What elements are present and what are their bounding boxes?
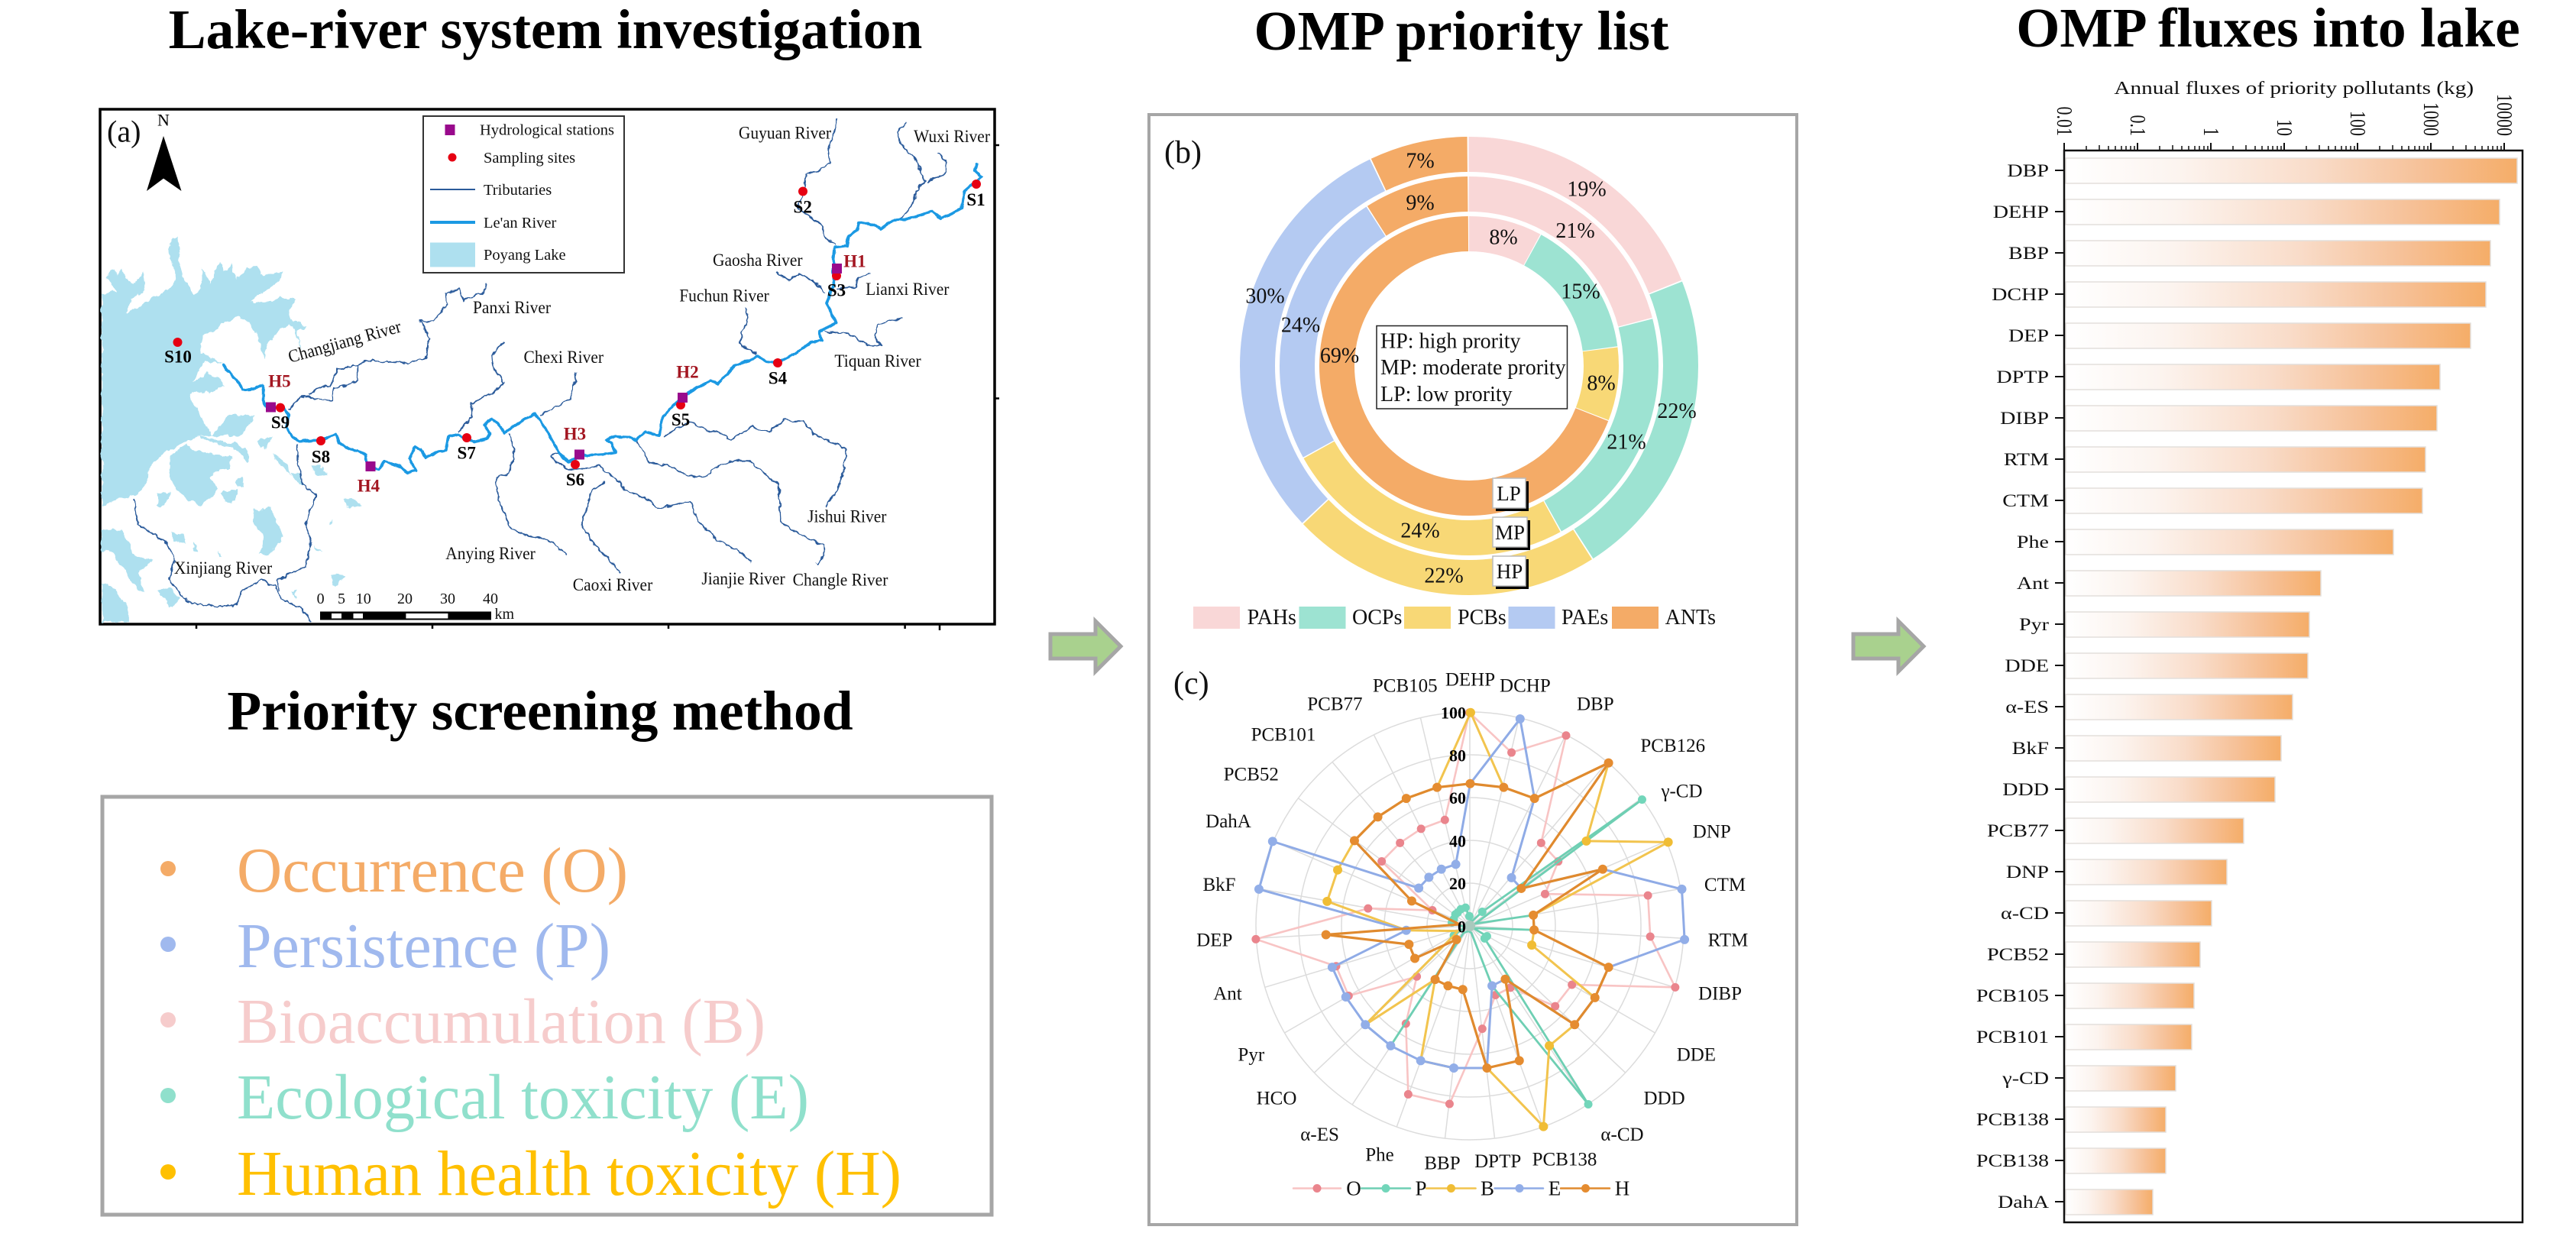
radar legend: O: [1346, 1176, 1361, 1199]
map: river name labels: Chexi River: [524, 347, 604, 367]
map: sampling site labels: S7: [458, 443, 476, 463]
map: hydrological station labels: H2: [676, 362, 699, 382]
map: river name labels: [174, 123, 990, 594]
map: sampling site labels: S6: [566, 471, 584, 489]
bar chart category labels: DBP: [2007, 160, 2049, 180]
donut percentage labels: 7%: [1406, 150, 1435, 173]
map: river name labels: Lianxi River: [866, 279, 950, 299]
radar category labels: γ-CD: [1660, 781, 1703, 802]
bar chart category labels: γ-CD: [2002, 1068, 2049, 1088]
radar axis numbers: 100: [1441, 703, 1466, 723]
map: river name labels: Fuchun River: [679, 286, 769, 306]
bar chart category labels: DIBP: [2000, 408, 2049, 428]
bar chart log axis ticks and labels: 1: [2199, 128, 2224, 136]
map: sampling site labels: S5: [672, 410, 690, 429]
ring: high priority (outer): [1257, 154, 1681, 578]
map: river name labels: Anying River: [445, 543, 536, 563]
map: scale bar: 20: [397, 591, 413, 607]
map: scale bar: 0: [317, 591, 325, 607]
bar chart log axis ticks and labels: [2052, 94, 2517, 150]
donut percentage labels: 30%: [1245, 284, 1285, 309]
map: hydrological station labels: [268, 252, 866, 495]
donut legend: PCBs: [1458, 606, 1506, 630]
series E: ecological toxicity: [1259, 719, 1684, 1068]
radar axis numbers: [1441, 703, 1466, 937]
map: legend box: Le'an River: [484, 215, 557, 231]
bar chart category labels: CTM: [2002, 490, 2049, 510]
radar category labels: DEHP: [1445, 669, 1495, 691]
bar chart log axis ticks and labels: 0.01: [2052, 107, 2077, 136]
map: Poyang Lake water body: [102, 236, 360, 623]
radar legend: E: [1549, 1176, 1561, 1199]
map: river name labels: Guyuan River: [739, 123, 832, 143]
bar chart log axis ticks and labels: 10000: [2492, 94, 2517, 136]
radar category labels: [1196, 669, 1748, 1173]
map: tributaries and Le'an River, west part: [134, 283, 504, 623]
bar chart category labels: DNP: [2006, 862, 2049, 882]
radar category labels: RTM: [1708, 930, 1748, 950]
bar chart log axis ticks and labels: 0.1: [2125, 115, 2150, 136]
arrow: left to middle: [1050, 621, 1121, 672]
map: river name labels: Jianjie River: [701, 568, 785, 588]
map: river name labels: Tiquan River: [834, 351, 921, 371]
donut percentage labels: 21%: [1607, 431, 1646, 454]
map: river name labels: Jishui River: [807, 506, 887, 526]
map: sampling site labels: S2: [794, 197, 812, 217]
radar category labels: DDE: [1677, 1045, 1716, 1065]
map: hydrological station labels: H3: [564, 425, 586, 443]
donut legend: PAHs: [1248, 606, 1296, 630]
radar category labels: Ant: [1213, 984, 1242, 1004]
ring tag: MP: MP: [1495, 521, 1525, 544]
ring tag: MP: [1493, 517, 1530, 550]
radar category labels: DDD: [1644, 1088, 1685, 1109]
radar axis numbers: 80: [1449, 746, 1466, 765]
bar chart log axis ticks and labels: 1000: [2419, 102, 2444, 136]
radar category labels: Pyr: [1238, 1045, 1265, 1065]
bar chart: annual fluxes: [1976, 77, 2523, 1222]
radar category labels: PCB101: [1251, 724, 1316, 745]
radar category labels: BBP: [1424, 1154, 1461, 1173]
panel: map of the lake-river system: [100, 109, 999, 630]
radar legend: P: [1415, 1176, 1427, 1199]
donut percentage labels: 8%: [1587, 371, 1616, 396]
radar category labels: DPTP: [1474, 1151, 1521, 1172]
panel letter c: (c): [1173, 666, 1209, 701]
bar chart log axis ticks and labels: 10: [2272, 119, 2297, 136]
bar chart category labels: Pyr: [2019, 614, 2049, 634]
bar chart axis title: Annual fluxes of priority pollutants (kg): [2114, 77, 2474, 98]
radar category labels: α-CD: [1600, 1125, 1644, 1145]
map: river name labels: Caoxi River: [573, 574, 653, 594]
map: sampling site labels: S4: [769, 368, 788, 388]
map: scale bar: 30: [440, 591, 455, 607]
bar chart category labels: DEHP: [1993, 202, 2049, 222]
map: legend box: Hydrological stations: [480, 122, 614, 139]
radar category labels: BkF: [1202, 875, 1236, 895]
panel: priority screening criteria list: [102, 797, 992, 1215]
radar category labels: DBP: [1577, 694, 1614, 715]
donut percentage labels: 22%: [1657, 400, 1697, 423]
bar chart category labels: Ant: [2017, 573, 2049, 593]
radar legend: H: [1615, 1176, 1629, 1199]
bar chart category labels: BBP: [2008, 243, 2049, 263]
ring: low priority (inner): [1337, 234, 1601, 498]
bar chart category labels: PCB77: [1987, 820, 2049, 840]
map: scale bar: 5: [338, 591, 345, 607]
map: river name labels: Wuxi River: [914, 126, 990, 146]
title: lake-river system investigation: Lake-river system investigation: [169, 0, 922, 60]
bullet item: ecological toxicity: Ecological toxicity (E): [237, 1062, 809, 1133]
bar chart category labels: DahA: [1998, 1192, 2050, 1212]
map: legend box: Tributaries: [484, 182, 552, 199]
map: scale bar: 40: [483, 591, 498, 607]
bar chart category labels: [1976, 160, 2050, 1212]
radar category labels: PCB105: [1373, 675, 1438, 696]
radar category labels: PCB77: [1307, 694, 1363, 715]
map: sampling site labels: [164, 190, 985, 489]
map: panel letter a: (a): [107, 115, 141, 148]
donut legend: [1193, 606, 1716, 630]
radar axis numbers: 60: [1449, 788, 1466, 808]
radar category labels: DahA: [1205, 811, 1251, 832]
donut center key box: MP: moderate prority: [1380, 356, 1566, 380]
bar chart category labels: PCB101: [1976, 1027, 2049, 1047]
map: legend box: Sampling sites: [484, 150, 575, 167]
donut legend: OCPs: [1352, 606, 1402, 630]
bullet item: bioaccumulation: Bioaccumulation (B): [237, 986, 765, 1057]
radar category labels: PCB52: [1224, 764, 1279, 785]
donut percentage labels: 69%: [1320, 344, 1359, 368]
map: sampling site markers: [173, 180, 981, 469]
map: north arrow: [147, 110, 182, 191]
bars: [2066, 158, 2517, 1215]
bar chart category labels: DDE: [2005, 655, 2049, 675]
donut percentage labels: 19%: [1567, 177, 1607, 202]
map: sampling site labels: S10: [164, 347, 192, 367]
bar chart category labels: α-CD: [2001, 903, 2049, 923]
series O: occurrence: [1256, 713, 1675, 1104]
bar chart category labels: PCB138: [1976, 1151, 2049, 1170]
bullet item: persistence: Persistence (P): [237, 911, 610, 982]
donut percentage labels: 22%: [1424, 564, 1464, 588]
donut center key box: LP: low prority: [1380, 383, 1513, 406]
map: hydrological station labels: H4: [358, 477, 380, 495]
ring tag: LP: [1493, 478, 1529, 511]
map: north arrow: N: [157, 110, 170, 130]
bar chart category ticks: [2055, 170, 2064, 1202]
radar grid: [1256, 712, 1684, 1140]
donut center key box: HP: high prority: [1380, 330, 1521, 353]
panel letter b: (b): [1164, 135, 1202, 170]
map: tributaries and Le'an River, east part: [496, 118, 982, 573]
radar category labels: PCB138: [1532, 1149, 1597, 1170]
map: sampling site labels: S3: [827, 281, 846, 299]
radar axis numbers: 0: [1458, 917, 1466, 937]
ring tag: LP: LP: [1497, 482, 1521, 505]
bar chart category labels: PCB138: [1976, 1109, 2049, 1129]
radar chart: [1196, 669, 1748, 1199]
donut percentage labels: 21%: [1555, 219, 1595, 243]
donut percentage labels: [1245, 150, 1697, 588]
map: river name labels: Changle River: [793, 570, 888, 590]
map: river name labels: Gaosha River: [713, 250, 803, 270]
donut legend: PAEs: [1561, 606, 1608, 630]
bar chart category labels: DEP: [2008, 325, 2049, 345]
radar category labels: CTM: [1704, 875, 1746, 895]
bar chart category labels: α-ES: [2005, 697, 2049, 717]
map: river name labels: Panxi River: [473, 297, 552, 317]
radar legend: B: [1481, 1176, 1494, 1199]
bar chart category labels: DDD: [2002, 779, 2049, 799]
bar chart category labels: RTM: [2004, 449, 2049, 469]
map: hydrological station labels: H5: [268, 371, 291, 391]
radar legend: [1293, 1176, 1629, 1199]
bar chart frame: [2064, 150, 2523, 1222]
donut percentage labels: 9%: [1406, 191, 1435, 215]
map: scale bar: 10: [356, 591, 371, 607]
map: sampling site labels: S1: [966, 190, 985, 209]
bar chart category labels: BkF: [2012, 738, 2049, 758]
bar chart category labels: Phe: [2017, 532, 2049, 552]
radar axis numbers: 20: [1449, 874, 1466, 893]
series B: bioaccumulation: [1327, 713, 1668, 1127]
bar chart log axis ticks and labels: 100: [2345, 111, 2371, 136]
donut percentage labels: 24%: [1281, 313, 1320, 338]
donut percentage labels: 15%: [1561, 280, 1600, 304]
radar category labels: PCB126: [1640, 736, 1705, 756]
radar axis numbers: 40: [1449, 831, 1466, 851]
map: scale bar: [317, 591, 515, 623]
bar chart category labels: PCB105: [1976, 986, 2049, 1005]
radar category labels: DNP: [1693, 822, 1731, 842]
bar chart category labels: PCB52: [1987, 944, 2049, 964]
bar chart category labels: DPTP: [1996, 367, 2049, 387]
bullet item: human health toxicity: Human health toxicity (H): [237, 1138, 901, 1209]
bar chart category labels: DCHP: [1992, 284, 2049, 304]
radar series: [1256, 713, 1684, 1127]
map: scale bar: km: [495, 606, 515, 623]
radar category labels: HCO: [1257, 1088, 1296, 1109]
title: priority screening method: Priority screening method: [227, 680, 853, 742]
title: OMP priority list: OMP priority list: [1254, 0, 1669, 62]
map: river name labels: Xinjiang River: [174, 558, 273, 578]
bullet item: occurrence: Occurrence (O): [237, 835, 628, 906]
donut center key box: [1377, 325, 1568, 409]
donut percentage labels: 24%: [1400, 519, 1440, 542]
map: sampling site labels: S8: [312, 448, 330, 466]
radar category labels: DIBP: [1698, 984, 1742, 1004]
radar category labels: Phe: [1365, 1144, 1394, 1166]
radar category labels: DCHP: [1500, 675, 1551, 696]
map: legend box: Poyang Lake: [484, 247, 566, 264]
ring tag: HP: HP: [1497, 560, 1523, 583]
radar category labels: DEP: [1196, 930, 1232, 950]
map: hydrological station markers: [266, 264, 842, 471]
map: hydrological station labels: H1: [843, 252, 866, 270]
ring: moderate priority (middle): [1297, 194, 1641, 538]
series H: human health toxicity: [1326, 763, 1609, 1068]
arrow: middle to right: [1853, 621, 1924, 672]
panel: priority list frame: [1149, 115, 1797, 1225]
map: sampling site labels: S9: [271, 413, 290, 432]
ring tag: HP: [1493, 556, 1529, 589]
series P: persistence: [1365, 800, 1642, 1105]
radar category labels: α-ES: [1300, 1125, 1339, 1145]
donut legend: ANTs: [1665, 606, 1716, 630]
map: legend box: [423, 116, 624, 273]
donut percentage labels: 8%: [1489, 226, 1518, 249]
donut chart: composition by priority: [1245, 150, 1697, 589]
map: river name labels: Changjiang River: [286, 316, 403, 367]
